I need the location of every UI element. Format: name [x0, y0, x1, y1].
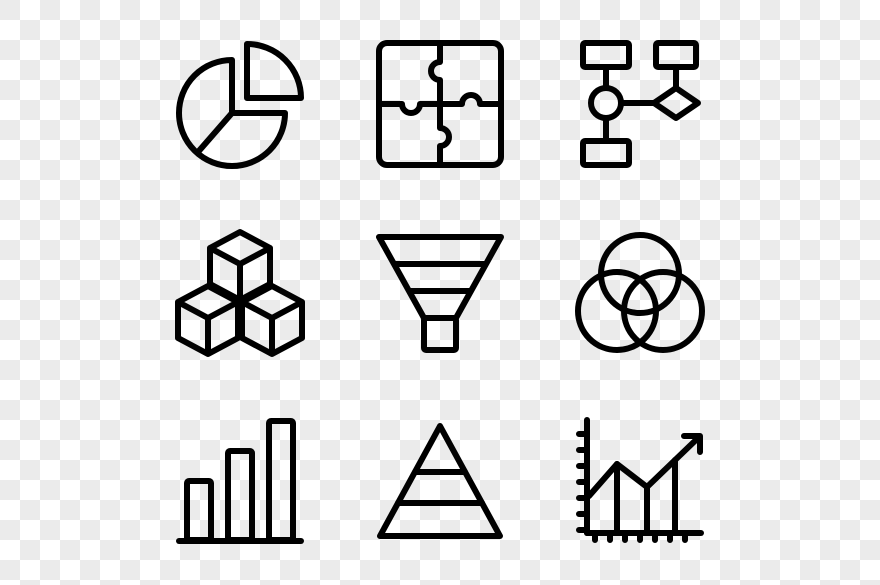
icon: venn [578, 235, 702, 350]
icon: pie chart [179, 44, 301, 166]
icon: cubes [178, 232, 302, 354]
icon: bar chart [179, 421, 301, 541]
icon: line chart [579, 420, 701, 540]
icon: flowchart [583, 43, 698, 165]
icon: pyramid [380, 426, 500, 536]
icon: funnel [379, 237, 501, 350]
icon: puzzle [379, 43, 501, 165]
